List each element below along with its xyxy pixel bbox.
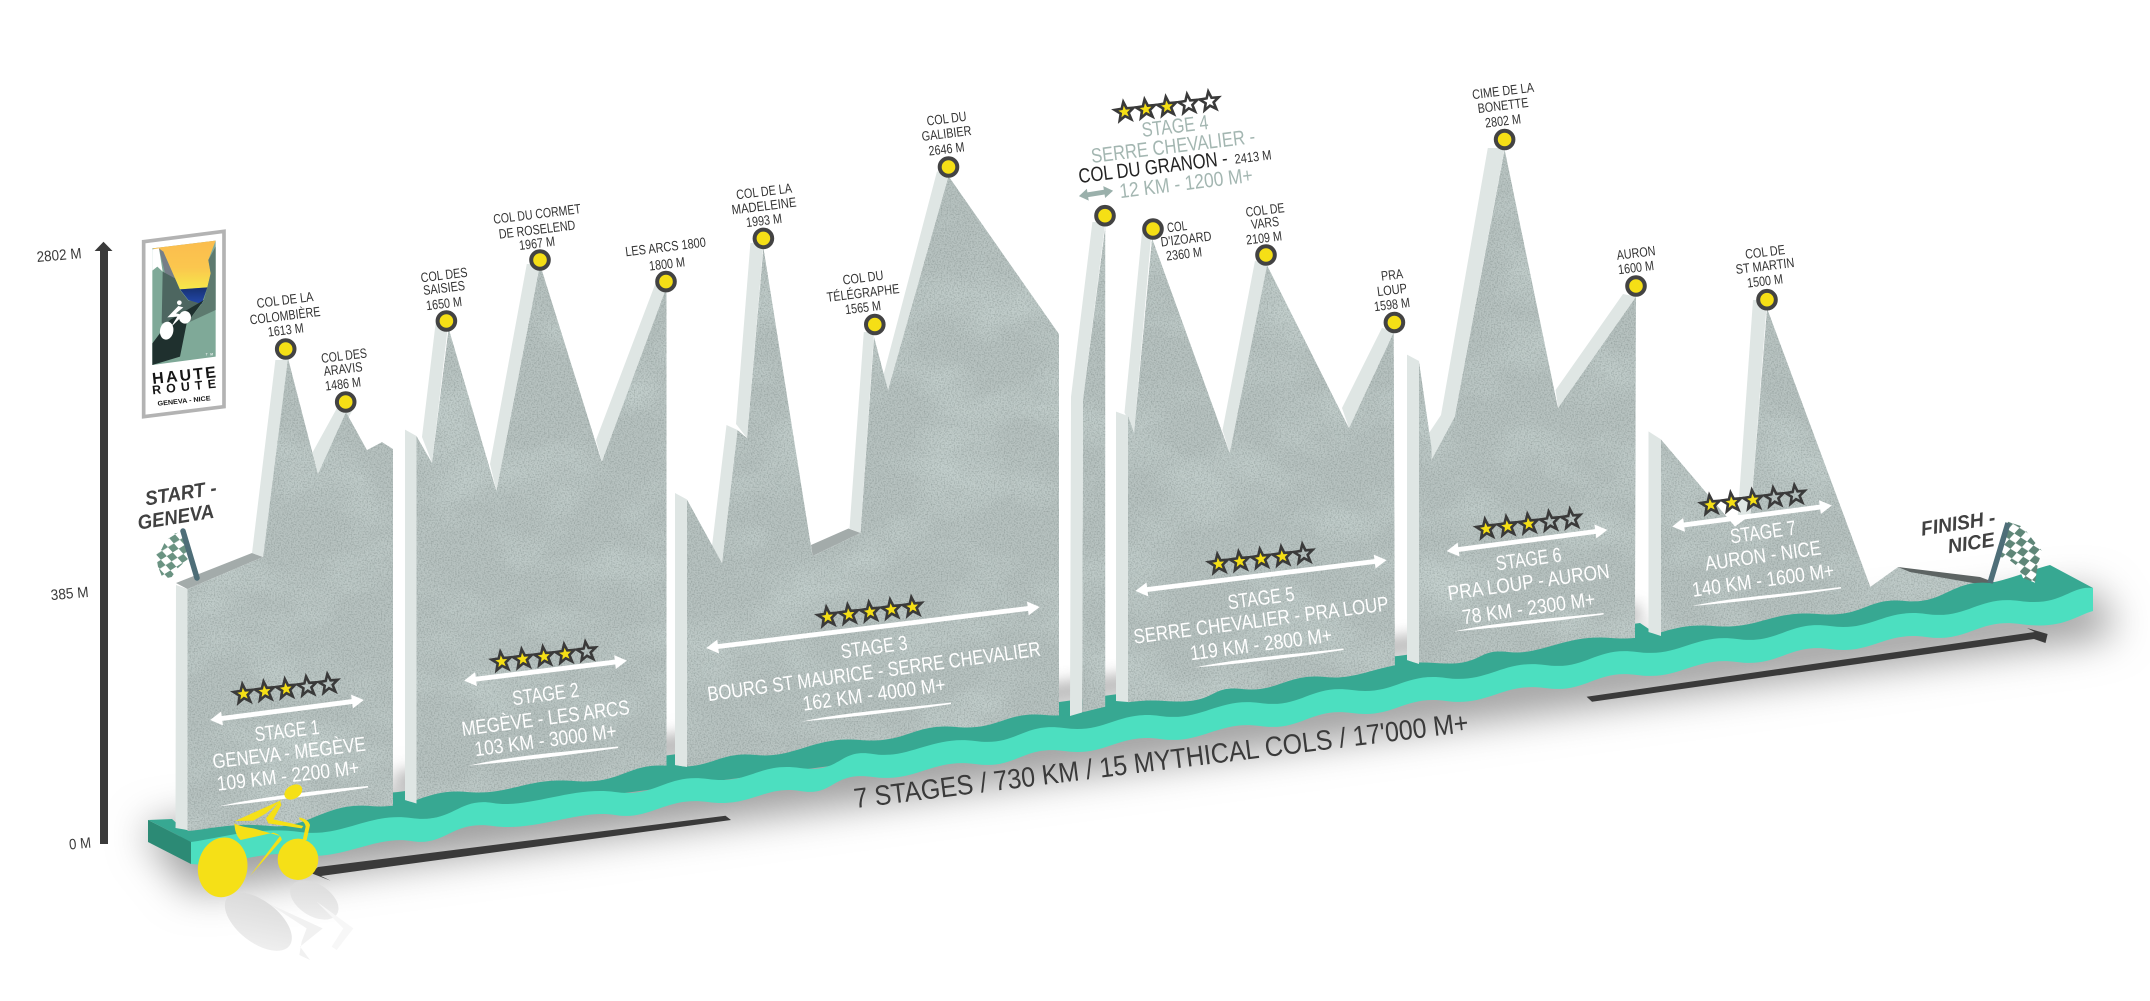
stage 1 text: 109 KM - 2200 M+ — [216, 756, 360, 796]
stage 6 distance arrow — [1446, 523, 1608, 558]
col label: Vars: 2109 M — [1245, 228, 1283, 248]
stage 6 ridge strips — [1429, 148, 1636, 460]
base back edge behind walls — [180, 623, 1665, 845]
col label: Galibier: COL DU — [926, 109, 967, 129]
stage 4 concrete profile — [1082, 226, 1105, 722]
logo: Haute Route poster: HAUTE — [151, 364, 217, 388]
col label: Vars: VARS — [1250, 214, 1280, 232]
stage 1 distance arrow — [209, 693, 365, 727]
stage 2 stars — [491, 641, 597, 671]
stage 2 ridge strips — [422, 264, 666, 491]
stage 1 concrete profile — [188, 358, 393, 836]
icon: yellow cyclist — [193, 781, 318, 901]
stage 6 text — [1446, 544, 1611, 629]
stage 5 stars — [1208, 543, 1314, 573]
finish ramp dark edge — [1898, 567, 2010, 588]
col label: Auron: AURON — [1616, 243, 1656, 263]
logo: Haute Route poster: TM — [206, 352, 213, 356]
stage 5 side strip — [1116, 412, 1128, 701]
logo: Haute Route poster: GENEVA - NICE — [157, 395, 212, 408]
stage 1 side strip — [176, 585, 188, 830]
stage 2 distance arrow — [463, 654, 628, 688]
stage 1 ridge strips — [252, 360, 353, 557]
stage 4 text: COL DU GRANON - — [1077, 147, 1229, 188]
stage 4 stars — [1114, 90, 1220, 121]
col label: Galibier: GALIBIER — [921, 123, 972, 144]
main summary text: 7 STAGES / 730 KM / 15 MYTHICAL COLS / 17'000 M+ — [852, 707, 1470, 814]
col label: Aravis: 1486 M — [324, 374, 362, 394]
col label: Madeleine: 1993 M — [745, 211, 783, 230]
stage 4 text — [1077, 111, 1272, 203]
stage 7 concrete profile — [1661, 308, 2008, 650]
stage 6 side strip — [1407, 355, 1419, 664]
col label: Vars: COL DE — [1245, 200, 1285, 220]
col label: Colombiere: COLOMBIÈRE — [249, 304, 321, 327]
start label — [136, 477, 218, 535]
stage 6 stars — [1475, 508, 1581, 538]
panel: stage 3 — [675, 109, 1059, 778]
stage 7 text: 140 KM - 1600 M+ — [1691, 559, 1835, 602]
stage 6 text: STAGE 6 — [1494, 544, 1563, 575]
stage 1 text: STAGE 1 — [253, 716, 321, 746]
stage 3 text: STAGE 3 — [839, 632, 909, 663]
stage 6 text: PRA LOUP - AURON — [1446, 560, 1611, 605]
col label: Colombiere — [249, 289, 321, 358]
stage 5 distance arrow — [1135, 553, 1387, 598]
col label: Pra Loup: PRA — [1380, 266, 1404, 284]
col label: Les Arcs: LES ARCS 1800 — [624, 235, 707, 259]
col label: Cime de la Bonette — [1471, 80, 1535, 148]
col label: Aravis — [320, 345, 368, 411]
panel: stage 7 — [1648, 242, 2010, 650]
elevation axis: 0 M — [68, 835, 92, 853]
stage 4 distance arrow — [1078, 185, 1114, 202]
stage 3 ledge — [811, 528, 860, 556]
col label: Cormet de Roselend: DE ROSELEND — [498, 217, 576, 242]
col label: St Martin: ST MARTIN — [1735, 255, 1795, 277]
col label: Galibier: 2646 M — [928, 139, 965, 159]
col label: Col du Granon dot — [1096, 207, 1114, 224]
icon: cyclist reflection — [215, 872, 353, 962]
logo: Haute Route poster: ROUTE — [151, 377, 217, 397]
elevation axis — [36, 242, 113, 853]
col label: St Martin — [1735, 242, 1795, 309]
stage 7 distance arrow — [1671, 499, 1833, 533]
stage 4 text: 12 KM - 1200 M+ — [1118, 164, 1254, 203]
col label: Colombiere: COL DE LA — [256, 289, 314, 311]
col label: Madeleine — [731, 181, 797, 247]
panel: stage 2 — [405, 201, 707, 815]
stage 1 text: GENEVA - MEGÈVE — [211, 733, 367, 774]
stage 7 side strip — [1648, 431, 1661, 635]
ground shadow — [145, 590, 2118, 892]
col label: Telegraphe: TÉLÉGRAPHE — [826, 281, 900, 305]
stage 4 side strip — [1070, 222, 1105, 716]
panel: stage 5 — [1116, 200, 1411, 714]
stage 1 text — [211, 716, 367, 796]
stage 4 text: SERRE CHEVALIER - — [1090, 125, 1256, 168]
stage 6 text: 78 KM - 2300 M+ — [1461, 588, 1597, 629]
stage 6 underline — [1454, 613, 1604, 632]
col label: Izoard: 2360 M — [1165, 244, 1203, 264]
col label: Izoard: D'IZOARD — [1160, 228, 1212, 250]
logo: Haute Route poster — [144, 231, 224, 417]
stage 2 text: 103 KM - 3000 M+ — [473, 720, 618, 761]
stage 3 concrete profile — [687, 176, 1059, 778]
col label: Les Arcs: 1800 M — [648, 254, 686, 274]
col label: Cormet de Roselend: COL DU CORMET — [492, 201, 582, 227]
stage 4 text: STAGE 4 — [1140, 111, 1210, 142]
col label: Cime de la Bonette: 2802 M — [1484, 111, 1522, 131]
stage 7 text: AURON - NICE — [1704, 536, 1823, 576]
elevation axis: 385 M — [50, 584, 89, 604]
stage 2 text — [460, 679, 631, 761]
col label: Aravis: COL DES — [320, 345, 368, 366]
col label: Telegraphe: COL DU — [842, 268, 884, 288]
stage 2 side strip — [405, 430, 416, 804]
stage 2 text: STAGE 2 — [511, 679, 580, 710]
stage 2 underline — [469, 746, 618, 766]
col label: Saisies: 1650 M — [425, 294, 463, 313]
stage 3 underline — [802, 702, 951, 722]
col label: Auron — [1616, 243, 1656, 295]
col label: Saisies: SAISIES — [422, 278, 466, 298]
col label: Colombiere: 1613 M — [267, 320, 304, 340]
col label: Madeleine: MADELEINE — [731, 195, 797, 217]
stage 3 text: BOURG ST MAURICE - SERRE CHEVALIER — [706, 638, 1042, 706]
stage 1 ledge — [176, 553, 263, 589]
col label: Cormet de Roselend: 1967 M — [518, 234, 556, 253]
stage 7 ridge strip — [1738, 300, 1767, 515]
col label: Izoard: COL — [1166, 218, 1188, 235]
side strip feet over the base — [176, 618, 1661, 830]
col label: Izoard — [1144, 218, 1212, 264]
col label: Auron: 1600 M — [1617, 258, 1655, 277]
finish label: FINISH - — [1919, 507, 1997, 541]
stage 3 distance arrow — [705, 600, 1041, 655]
col label: Cormet de Roselend — [492, 201, 582, 269]
panel: stage 6 — [1407, 80, 1656, 675]
stage 5 text: SERRE CHEVALIER - PRA LOUP — [1132, 592, 1390, 649]
stage 3 text: 162 KM - 4000 M+ — [801, 673, 947, 716]
stage 4 text: 2413 M — [1234, 147, 1272, 167]
stage 2 text: MEGÈVE - LES ARCS — [460, 696, 631, 741]
col label: Pra Loup: LOUP — [1376, 281, 1408, 299]
col label: Galibier — [921, 109, 972, 176]
base left side — [148, 820, 191, 864]
elevation axis: 2802 M — [36, 245, 82, 266]
finish label — [1919, 507, 1997, 558]
stage 5 text: 119 KM - 2800 M+ — [1189, 624, 1333, 665]
col label: Cime de la Bonette: CIME DE LA — [1471, 80, 1535, 102]
col label: St Martin: COL DE — [1744, 242, 1786, 262]
panel: stage 1 — [176, 289, 393, 836]
stage 2 concrete profile — [416, 264, 666, 815]
total distance arrow right — [1587, 628, 2048, 702]
col label: Saisies — [420, 265, 468, 330]
col label: Telegraphe — [826, 268, 900, 333]
stage 7 stars — [1700, 484, 1806, 514]
stage 1 underline — [218, 786, 368, 806]
col label: Saisies: COL DES — [420, 265, 468, 285]
col label: Madeleine: COL DE LA — [735, 181, 793, 202]
stage 5 concrete profile — [1128, 238, 1395, 714]
stage 3 stars — [817, 596, 923, 626]
stage 5 text: STAGE 5 — [1226, 583, 1296, 614]
start label: START - — [144, 477, 218, 510]
stage 5 ridge strips — [1124, 226, 1394, 453]
col label: Pra Loup — [1373, 266, 1411, 331]
stage 5 underline — [1195, 648, 1344, 668]
stage 7 text — [1691, 517, 1835, 602]
base front wave band — [191, 588, 2093, 865]
col label: Pra Loup: 1598 M — [1373, 295, 1411, 314]
stage 3 ridge strips — [712, 171, 948, 563]
stage 1 stars — [233, 673, 339, 703]
panel: stage 4 Col du Granon — [1070, 90, 1272, 722]
total distance arrow left — [311, 816, 731, 881]
col label: Vars — [1245, 200, 1285, 264]
icon: start chequered flag — [156, 531, 197, 579]
col label: Les Arcs — [624, 235, 707, 290]
base top surface wave — [148, 565, 2093, 850]
icon: finish chequered flag — [1990, 522, 2043, 583]
stage 5 text — [1132, 583, 1390, 665]
finish label: NICE — [1946, 529, 1997, 558]
stage 7 text: STAGE 7 — [1729, 517, 1797, 548]
stage 3 text — [706, 632, 1042, 716]
stage 3 side strip — [675, 493, 687, 767]
stage 7 underline — [1692, 587, 1841, 606]
col label: St Martin: 1500 M — [1746, 271, 1784, 291]
axis arrow — [95, 242, 112, 844]
col label: Aravis: ARAVIS — [323, 359, 363, 379]
start label: GENEVA — [136, 501, 216, 535]
col label: Cime de la Bonette: BONETTE — [1477, 95, 1529, 116]
stage 6 concrete profile — [1419, 149, 1636, 675]
col label: Telegraphe: 1565 M — [844, 298, 882, 317]
